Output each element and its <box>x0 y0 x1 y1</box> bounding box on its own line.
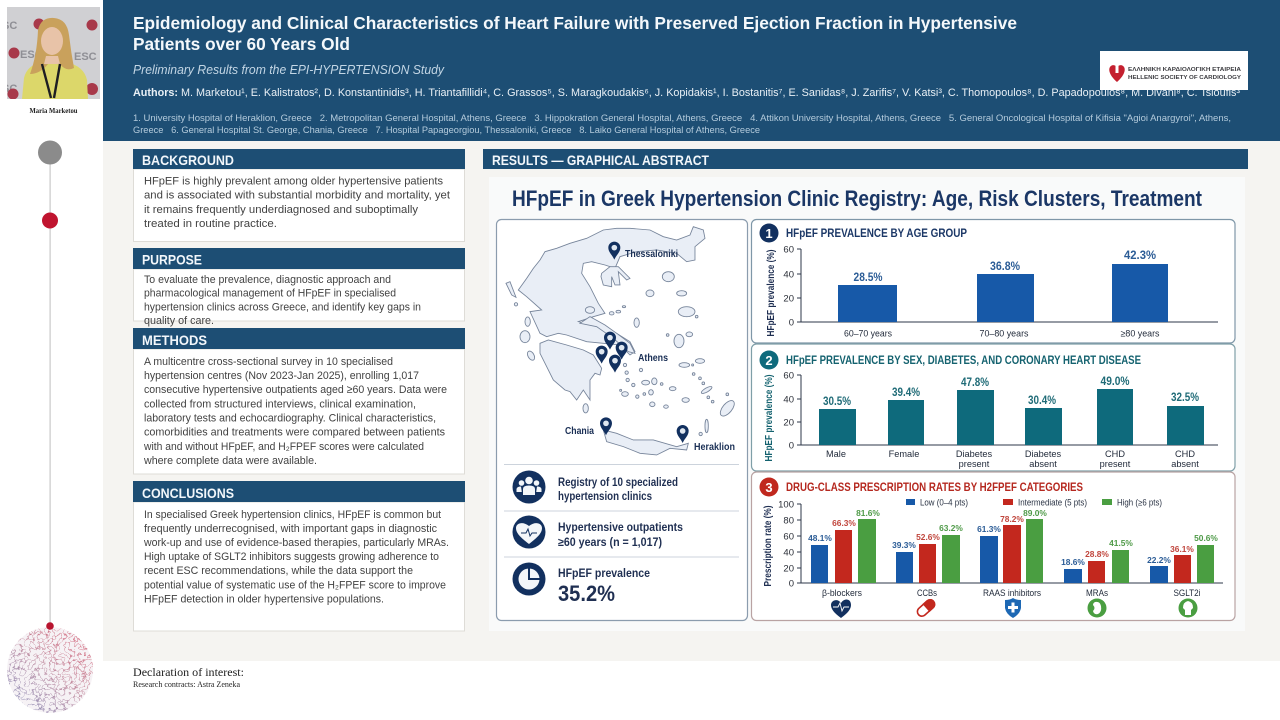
bar chart: prescription rates: 89.0% <box>1023 508 1047 518</box>
pin: Athens 1 <box>604 332 616 350</box>
bar chart: age: 60–70 years <box>844 328 892 338</box>
legend: High (≥6 pts) <box>1117 498 1162 508</box>
bar chart: prescription rates: 18.6% <box>1061 557 1085 567</box>
declaration of interest: Declaration of interest: <box>133 665 244 679</box>
title <box>133 13 1017 54</box>
map of Greece <box>506 227 737 455</box>
title: Epidemiology and Clinical Characteristics of Heart Failure with Preserved Ejection Fraction in Hypertensive <box>133 13 1017 33</box>
heading: background: BACKGROUND <box>142 152 234 168</box>
map labels <box>565 248 735 453</box>
pin: Athens 2 <box>616 342 628 360</box>
presenter photo: ESC <box>74 51 97 63</box>
bar chart: prescription rates: CCBs <box>917 588 937 598</box>
bar chart: prescription rates <box>763 500 1223 598</box>
text: background: treated in routine practice. <box>144 218 277 230</box>
bar chart: age: 60 <box>783 244 794 256</box>
number badge 1 <box>760 224 778 242</box>
timeline <box>38 140 62 626</box>
text: conclusions: potential value of systematic use of the H₂FPEF score to improve <box>144 579 446 591</box>
map labels: Chania <box>565 425 594 437</box>
bar chart: sex, diabetes, CHD: 30.4% <box>1028 395 1056 407</box>
bar chart: sex, diabetes, CHD: 32.5% <box>1171 392 1199 404</box>
bar chart: sex, diabetes, CHD: absent <box>1171 459 1199 469</box>
stat text: outpatients: Hypertensive outpatients <box>558 522 683 534</box>
text: background: HFpEF is highly prevalent among older hypertensive patients <box>144 176 443 188</box>
heading: methods: METHODS <box>142 332 207 348</box>
text: conclusions: work-up and use of evidence-based therapies, particularly MRAs. <box>143 537 449 549</box>
bar chart: prescription rates: β-blockers <box>822 588 862 598</box>
bar chart: sex, diabetes, CHD: HFpEF prevalence (%) <box>764 374 775 462</box>
bar chart: age: 20 <box>783 294 794 304</box>
bar chart: prescription rates: Prescription rate (%) <box>763 506 774 586</box>
stat text: outpatients <box>558 522 683 549</box>
map labels: Athens <box>638 352 668 364</box>
bar chart: prescription rates: 0 <box>789 578 794 590</box>
text: conclusions <box>143 509 449 605</box>
text: methods: laboratory tests and echocardiography. Clinical characteristics, <box>144 412 436 424</box>
bar chart: prescription rates: 60 <box>783 532 794 542</box>
text: purpose: To evaluate the prevalence, diagnostic approach and <box>144 274 391 286</box>
bar chart: prescription rates: 81.6% <box>856 508 880 518</box>
bar chart: age: ≥80 years <box>1120 328 1160 338</box>
bar chart: sex, diabetes, CHD <box>764 370 1218 469</box>
bar chart: age: 40 <box>783 270 794 280</box>
header banner <box>103 0 1280 141</box>
number badge 1: 1 <box>765 226 773 241</box>
chart heading 3: DRUG-CLASS PRESCRIPTION RATES BY H2FPEF CATEGORIES <box>786 482 1083 494</box>
presenter name: Maria Marketou <box>30 108 78 115</box>
bar chart: sex, diabetes, CHD: Diabetes <box>1025 449 1062 459</box>
icon: shield <box>1005 598 1021 618</box>
stat text: prevalence: HFpEF prevalence <box>558 568 650 580</box>
text: purpose: hypertension clinics across Greece, and identify key gaps in <box>144 301 421 313</box>
icon: heart <box>831 599 851 618</box>
icon: pill <box>915 597 938 619</box>
icon: kidney <box>1088 598 1106 618</box>
text: conclusions: recent ESC recommendations, while the data support the <box>144 565 413 577</box>
bar chart: prescription rates: 40 <box>783 548 794 558</box>
heading: background <box>133 149 465 169</box>
text: methods: where complete data were available. <box>143 455 317 467</box>
text: conclusions: In specialised Greek hypertension clinics, HFpEF is common but <box>144 509 442 521</box>
bar chart: prescription rates: 36.1% <box>1170 544 1194 554</box>
bar chart: sex, diabetes, CHD: CHD <box>1105 449 1125 459</box>
logo: Hellenic Society of Cardiology: ΕΛΛΗΝΙΚΗ ΚΑΡΔΙΟΛΟΓΙΚΗ ΕΤΑΙΡΕΙΑ <box>1128 67 1241 73</box>
presenter photo: ESC <box>20 49 43 61</box>
heading: conclusions: CONCLUSIONS <box>142 485 234 501</box>
bar chart: prescription rates: 39.3% <box>892 540 916 550</box>
number badge 3 <box>760 478 778 496</box>
text: purpose <box>144 274 421 327</box>
logo: Hellenic Society of Cardiology <box>1100 51 1248 90</box>
stat text: registry: Registry of 10 specialized <box>558 477 678 489</box>
bar chart: sex, diabetes, CHD: 49.0% <box>1100 376 1130 388</box>
stat text: prevalence: 35.2% <box>558 581 615 606</box>
declaration of interest: Research contracts: Astra Zeneka <box>133 680 240 689</box>
bar chart: prescription rates: MRAs <box>1086 588 1108 598</box>
map labels: Heraklion <box>694 441 735 453</box>
presenter photo: SC <box>2 20 17 32</box>
stat text: outpatients: ≥60 years (n = 1,017) <box>558 537 662 549</box>
bar chart: prescription rates: 22.2% <box>1147 555 1171 565</box>
heading: purpose <box>133 248 465 269</box>
bar chart: sex, diabetes, CHD: present <box>959 459 990 469</box>
text: methods <box>143 356 447 467</box>
subtitle: Preliminary Results from the EPI-HYPERTENSION Study <box>133 62 445 77</box>
panel: drug-class prescription rates <box>752 472 1235 620</box>
stat: outpatients <box>512 516 683 549</box>
legend: Low (0–4 pts) <box>920 498 968 508</box>
bar chart: prescription rates: 52.6% <box>916 532 940 542</box>
bar chart: age: 70–80 years <box>980 328 1029 338</box>
bar chart: sex, diabetes, CHD: 60 <box>783 370 794 382</box>
text: conclusions: HFpEF detection in older hypertensive populations. <box>144 593 384 605</box>
panel: methods <box>133 328 465 474</box>
bar chart: sex, diabetes, CHD: present <box>1100 459 1131 469</box>
bar chart: prescription rates: 28.8% <box>1085 549 1109 559</box>
declaration of interest <box>133 665 244 689</box>
bar chart: sex, diabetes, CHD: 40 <box>783 394 794 406</box>
bar chart: prescription rates: 61.3% <box>977 524 1001 534</box>
title: Patients over 60 Years Old <box>133 34 350 54</box>
logo: Hellenic Society of Cardiology: HELLENIC SOCIETY OF CARDIOLOGY <box>1128 75 1241 81</box>
text: conclusions: High uptake of SGLT2 inhibitors suggests growing adherence to <box>144 551 439 563</box>
heading: results: RESULTS — GRAPHICAL ABSTRACT <box>492 152 709 168</box>
bar chart: age: 42.3% <box>1124 250 1156 262</box>
pin: Athens 4 <box>609 355 621 373</box>
panel: background <box>133 149 465 242</box>
number badge 3: 3 <box>765 480 773 495</box>
icon: heart with pulse <box>512 516 546 548</box>
legend: Intermediate (5 pts) <box>1018 498 1087 508</box>
panel: conclusions <box>133 481 465 631</box>
text: methods: collected from structured interviews, clinical examination, <box>144 398 416 410</box>
decorative network sphere <box>7 622 93 713</box>
bar chart: sex, diabetes, CHD: 47.8% <box>961 377 989 389</box>
legend <box>906 498 1162 508</box>
bar chart: prescription rates: 41.5% <box>1109 538 1133 548</box>
bar chart: sex, diabetes, CHD: 30.5% <box>823 396 851 408</box>
icon: pie chart <box>512 562 546 596</box>
text: methods: hypertension centres (Nov 2023-Jan 2025), enrolling 1,017 <box>144 370 419 382</box>
pin: Thessaloniki <box>608 242 620 260</box>
panel: prevalence by age <box>752 220 1235 343</box>
text: background: and is associated with substantial morbidity and mortality, yet <box>144 190 451 202</box>
bar chart: prescription rates: 50.6% <box>1194 533 1218 543</box>
bar chart: sex, diabetes, CHD: Female <box>889 449 919 459</box>
stat text: prevalence <box>558 568 650 606</box>
bar chart: prescription rates: 80 <box>783 516 794 526</box>
heading: purpose: PURPOSE <box>142 252 202 268</box>
pin: Athens 3 <box>596 346 608 364</box>
bar chart: prescription rates: SGLT2i <box>1174 588 1200 598</box>
bar chart: sex, diabetes, CHD: absent <box>1029 459 1057 469</box>
bar chart: prescription rates: 20 <box>783 564 794 574</box>
stat: prevalence <box>512 562 650 606</box>
bar chart: sex, diabetes, CHD: Male <box>826 449 846 459</box>
bar chart: prescription rates: 100 <box>778 500 794 510</box>
affiliations: Greece 6. General Hospital St. George, Chania, Greece 7. Hospital Papageorgiou, Thessaloniki, Greece 8. Laiko General Hospital of Athens, Greece <box>133 124 760 135</box>
bar chart: age <box>766 244 1218 338</box>
text: methods: consecutive hypertensive outpatients aged ≥60 years. Data were <box>144 384 447 396</box>
text: background: it remains frequently underdiagnosed and suboptimally <box>144 204 418 216</box>
text: purpose: pharmacological management of HFpEF in specialised <box>144 288 396 300</box>
bar chart: age: 28.5% <box>854 272 882 284</box>
number badge 2 <box>760 350 778 370</box>
text: conclusions: frequently underrecognised, with important gaps in diagnostic <box>144 523 437 535</box>
chart heading 1: HFpEF PREVALENCE BY AGE GROUP <box>786 228 967 240</box>
graphical abstract panel <box>489 177 1245 631</box>
text: methods: A multicentre cross-sectional survey in 10 specialised <box>144 356 393 368</box>
bar chart: age: 36.8% <box>990 261 1020 273</box>
bar chart: sex, diabetes, CHD: 20 <box>783 418 794 428</box>
bar chart: prescription rates: 66.3% <box>832 518 856 528</box>
text: background <box>144 176 451 230</box>
panel: registry overview <box>496 220 748 620</box>
text: purpose: quality of care. <box>144 315 214 327</box>
panel: purpose <box>133 248 465 327</box>
map labels: Thessaloniki <box>625 248 678 260</box>
chart heading 2: HFpEF PREVALENCE BY SEX, DIABETES, AND CORONARY HEART DISEASE <box>786 355 1141 367</box>
bar chart: sex, diabetes, CHD: 0 <box>789 440 794 452</box>
bar chart: prescription rates: 63.2% <box>939 523 963 533</box>
stat: registry <box>512 470 678 504</box>
bar chart: age: 0 <box>789 318 794 328</box>
heading: results <box>483 149 1248 169</box>
authors: Authors: M. Marketou¹, E. Kalistratos², D. Konstantinidis³, H. Triantafillidi⁴, C. Grassos⁵, S. Maragkoudakis⁶, J. Kopidakis¹, I. Bostanitis⁷, E. Sanidas⁸, J. Zarifis⁷, V. Katsi³, C. Thomopoulos⁸, D. Papadopoulos⁸, M. Divani⁸, C. Tsioufis³ <box>133 87 1240 99</box>
presenter photo: SC <box>2 83 17 95</box>
bar chart: sex, diabetes, CHD: Diabetes <box>956 449 993 459</box>
stat text: registry: hypertension clinics <box>558 491 652 503</box>
panel: prevalence by sex, diabetes, CHD <box>752 344 1235 471</box>
bar chart: prescription rates: 78.2% <box>1000 514 1024 524</box>
bar chart: sex, diabetes, CHD: 39.4% <box>892 387 920 399</box>
presenter photo <box>2 7 100 100</box>
pin: Chania <box>600 417 612 435</box>
text: methods: with and without HFpEF, and H₂FPEF scores were calculated <box>143 441 424 453</box>
heading: conclusions <box>133 481 465 502</box>
number badge 2: 2 <box>765 353 773 368</box>
icon: people <box>512 470 546 504</box>
affiliations: 1. University Hospital of Heraklion, Greece 2. Metropolitan General Hospital, Athens, Greece 3. Hippokration General Hospital, Athens, Greece 4. Attikon University Hospital, Athens, Greece 5. General Oncological Hospital of Kifisia "Agioi Anargyroi", Athens, <box>133 112 1231 123</box>
heading: methods <box>133 328 465 349</box>
pin: Heraklion <box>677 425 689 443</box>
stat text: registry <box>558 477 678 503</box>
bar chart: prescription rates: 48.1% <box>808 533 832 543</box>
affiliations <box>133 112 1231 135</box>
text: methods: comorbidities and treatments were compared between patients <box>144 427 445 439</box>
bar chart: prescription rates: RAAS inhibitors <box>983 588 1041 598</box>
bar chart: age: HFpEF prevalence (%) <box>766 250 777 336</box>
icon: organ <box>1178 598 1198 618</box>
bar chart: sex, diabetes, CHD: CHD <box>1175 449 1195 459</box>
dividers <box>504 464 739 558</box>
